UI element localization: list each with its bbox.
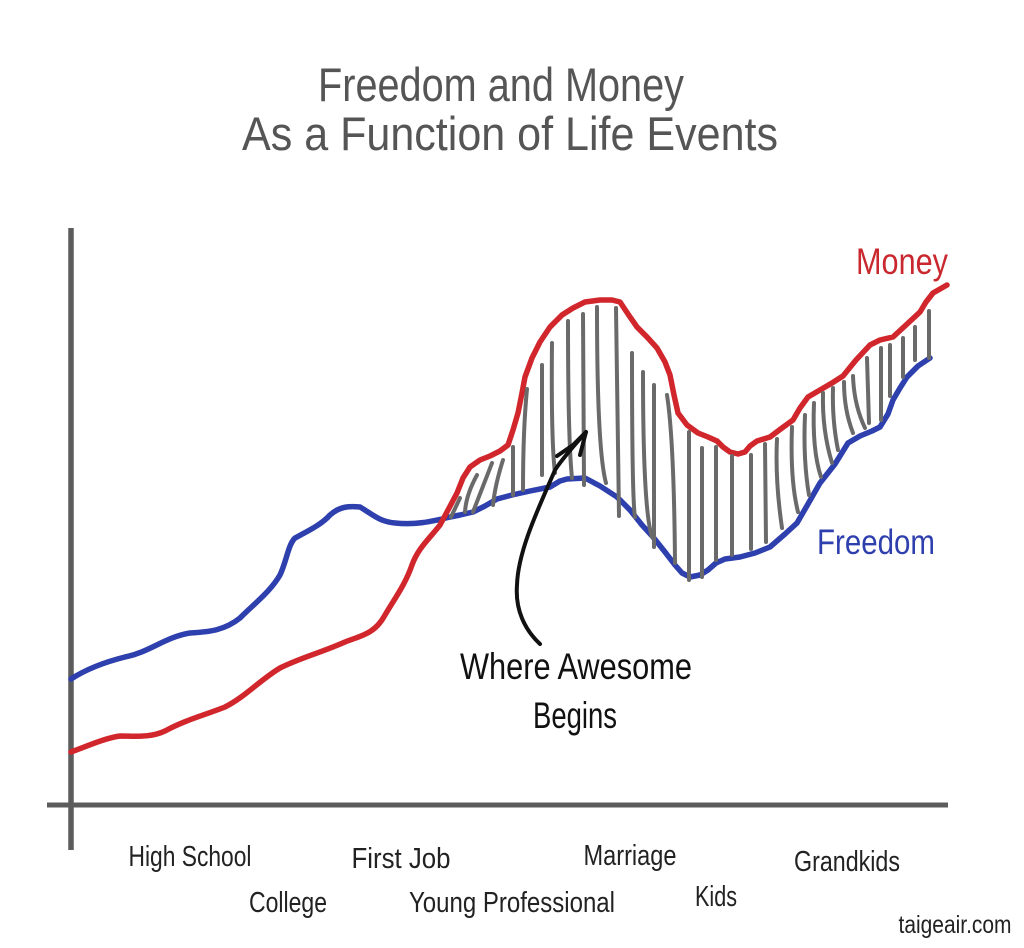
freedom curve xyxy=(71,358,930,679)
life event labels: Grandkids xyxy=(794,846,900,878)
title xyxy=(242,58,778,160)
life event labels: High School xyxy=(128,841,252,873)
x axis xyxy=(47,802,948,808)
life event labels: Marriage xyxy=(584,840,676,872)
callout: Where Awesome Begins xyxy=(460,646,692,736)
callout: Where Awesome Begins: Where Awesome xyxy=(460,646,692,687)
title: Freedom and Money xyxy=(318,58,684,111)
title: As a Function of Life Events xyxy=(242,107,778,160)
y axis xyxy=(68,228,74,850)
money curve xyxy=(71,285,947,752)
callout: Where Awesome Begins: Begins xyxy=(533,695,617,736)
shaded hatching between curves xyxy=(451,307,929,580)
life event labels: First Job xyxy=(352,843,450,875)
life event labels xyxy=(128,840,900,919)
label: Money: Money xyxy=(856,241,948,282)
life event labels: College xyxy=(249,887,327,919)
arrow to shaded area xyxy=(517,432,586,644)
life event labels: Young Professional xyxy=(409,887,615,919)
life event labels: Kids xyxy=(695,881,737,913)
label: Freedom: Freedom xyxy=(817,523,935,562)
